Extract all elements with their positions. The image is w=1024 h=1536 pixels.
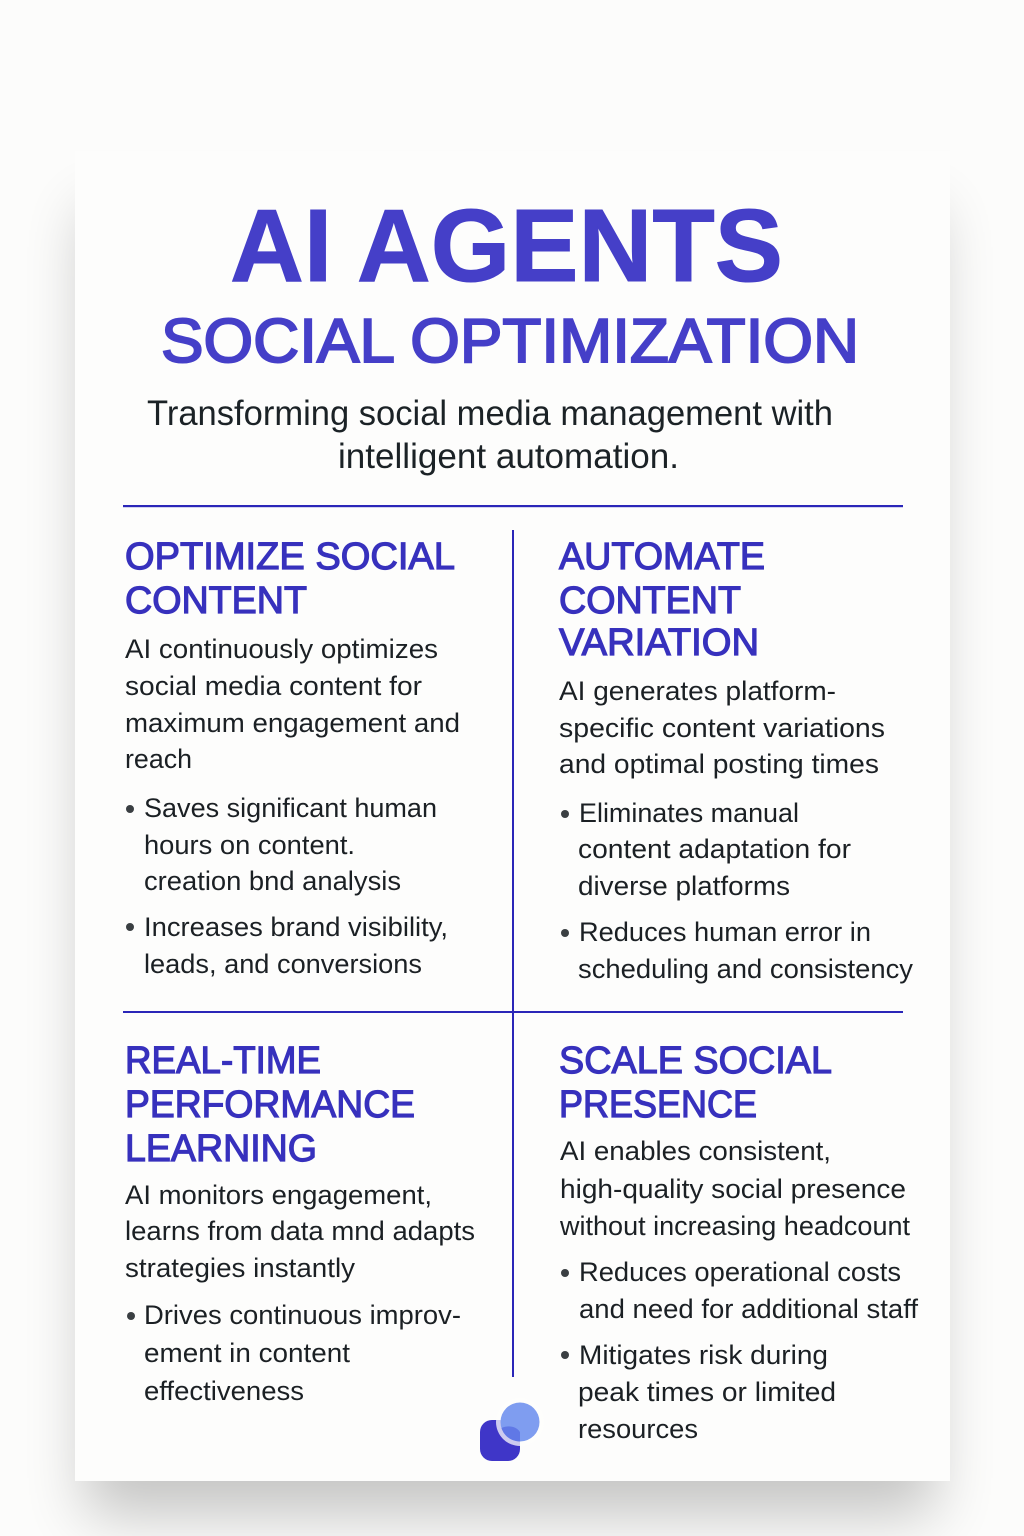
description: real-time performance learning — [125, 1180, 475, 1283]
bullets: optimize social content: leads, and conversions — [144, 949, 422, 979]
bullets: optimize social content: creation bnd analysis — [144, 866, 401, 896]
bullets: automate content variation: Eliminates manual — [579, 798, 799, 828]
heading: automate content variation — [559, 536, 765, 664]
bullets: scale social presence: resources — [578, 1414, 698, 1444]
description: optimize social content — [125, 634, 460, 774]
bullets: automate content variation — [561, 798, 913, 984]
tagline — [147, 394, 833, 476]
tagline: intelligent automation. — [338, 437, 679, 476]
description: scale social presence: high-quality social presence — [560, 1174, 906, 1204]
description: automate content variation: specific content variations — [559, 713, 885, 743]
tagline: Transforming social media management with — [147, 394, 833, 433]
bullets: scale social presence: Mitigates risk during — [579, 1340, 828, 1370]
bullets: real-time performance learning: ement in content — [144, 1338, 350, 1368]
heading: automate content variation: VARIATION — [559, 622, 759, 664]
bullets: optimize social content: hours on content. — [144, 830, 355, 860]
bullets: automate content variation: Reduces human error in — [579, 917, 871, 947]
heading: scale social presence: SCALE SOCIAL — [559, 1040, 832, 1082]
description: optimize social content: maximum engagement and — [125, 708, 460, 738]
heading: real-time performance learning: REAL-TIME — [125, 1040, 321, 1082]
bullets: optimize social content — [126, 793, 448, 979]
bullets: optimize social content: Increases brand visibility, — [144, 912, 448, 942]
heading: optimize social content: CONTENT — [125, 580, 307, 622]
subtitle heading: SOCIAL OPTIMIZATION — [161, 307, 859, 376]
description: automate content variation: AI generates platform- — [559, 676, 836, 706]
bullets: real-time performance learning: Drives continuous improv- — [144, 1300, 461, 1330]
description: real-time performance learning: AI monitors engagement, — [125, 1180, 432, 1210]
bullets: automate content variation: content adaptation for — [578, 834, 851, 864]
description: real-time performance learning: learns from data mnd adapts — [125, 1216, 475, 1246]
panel: optimize social content — [125, 536, 460, 979]
description: automate content variation — [559, 676, 885, 779]
heading: scale social presence: PRESENCE — [559, 1084, 757, 1126]
title: AI AGENTS — [230, 188, 783, 303]
description: scale social presence: without increasing headcount — [559, 1211, 910, 1241]
panel: automate content variation — [559, 536, 913, 984]
bullets: optimize social content: Saves significant human — [144, 793, 437, 823]
description: optimize social content: social media content for — [125, 671, 422, 701]
description: automate content variation: and optimal posting times — [559, 749, 879, 779]
description: real-time performance learning: strategies instantly — [125, 1253, 356, 1283]
heading: optimize social content — [125, 536, 455, 622]
heading: automate content variation: AUTOMATE — [559, 536, 765, 578]
heading: automate content variation: CONTENT — [559, 580, 741, 622]
heading: real-time performance learning: LEARNING — [125, 1128, 317, 1170]
description: scale social presence: AI enables consistent, — [560, 1136, 831, 1166]
panel: main card — [75, 151, 950, 1481]
panel: real-time performance learning — [125, 1040, 475, 1406]
icon: overlapping logo — [480, 1398, 544, 1461]
bullets: automate content variation: diverse platforms — [578, 871, 790, 901]
bullets: scale social presence: Reduces operational costs — [579, 1257, 901, 1287]
heading: real-time performance learning: PERFORMANCE — [125, 1084, 415, 1126]
description: scale social presence — [559, 1136, 910, 1241]
bullets: real-time performance learning: effectiveness — [144, 1376, 304, 1406]
bullets: scale social presence — [561, 1257, 918, 1444]
bullets: automate content variation: scheduling and consistency — [578, 954, 913, 984]
heading: optimize social content: OPTIMIZE SOCIAL — [125, 536, 455, 578]
bullets: real-time performance learning — [127, 1300, 461, 1406]
panel: scale social presence — [559, 1040, 918, 1444]
description: optimize social content: reach — [125, 744, 192, 774]
description: optimize social content: AI continuously optimizes — [125, 634, 438, 664]
heading: real-time performance learning — [125, 1040, 415, 1170]
heading: scale social presence — [559, 1040, 832, 1126]
bullets: scale social presence: and need for additional staff — [579, 1294, 918, 1324]
bullets: scale social presence: peak times or limited — [578, 1377, 836, 1407]
